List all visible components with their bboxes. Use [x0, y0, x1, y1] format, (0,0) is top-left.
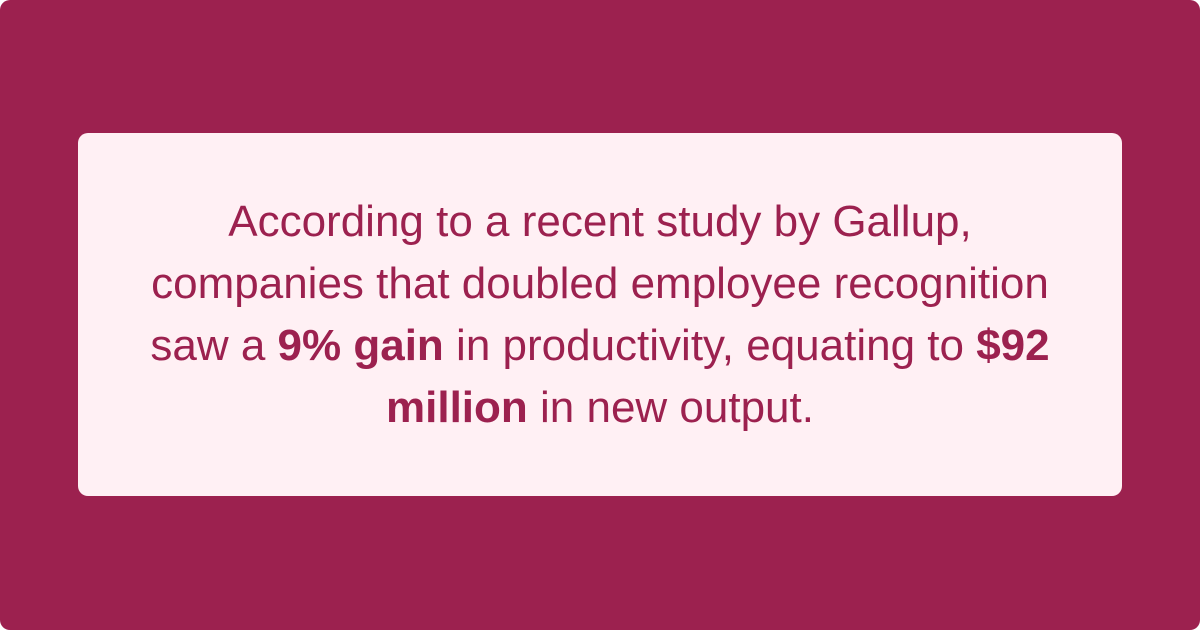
text block: Gallup statistic: million in new output.: [386, 382, 814, 432]
text block: Gallup statistic: companies that doubled employee recognition: [151, 258, 1049, 308]
text block: Gallup statistic: [150, 196, 1050, 432]
text block: Gallup statistic: According to a recent study by Gallup,: [228, 196, 972, 246]
panel: quote card: [78, 133, 1122, 496]
text block: Gallup statistic: saw a 9% gain in productivity, equating to $92: [150, 320, 1050, 370]
